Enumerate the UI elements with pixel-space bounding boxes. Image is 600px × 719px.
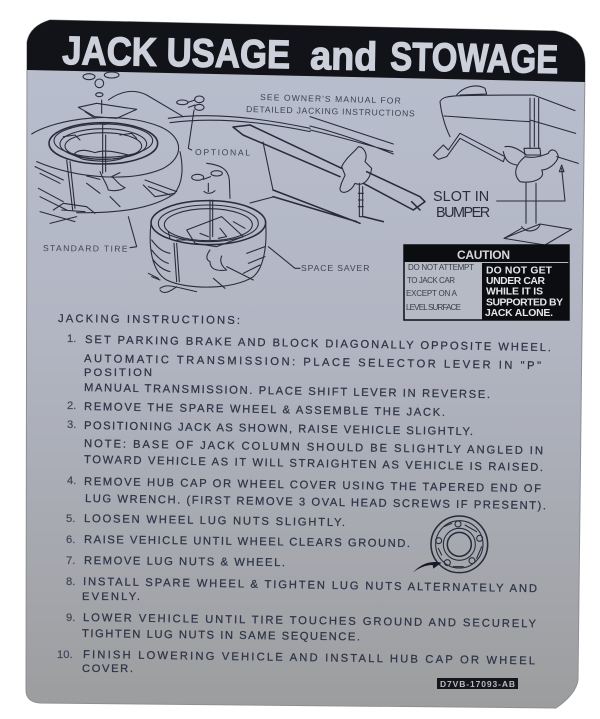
step 3 (67, 419, 543, 474)
caution warning block (482, 263, 569, 320)
caution panel: JACK ALONE. (485, 308, 553, 319)
step 4: LUG WRENCH. (FIRST REMOVE 3 OVAL HEAD SCREWS IF PRESENT). (85, 493, 546, 512)
callout: standard tire: STANDARD TIRE (43, 243, 129, 254)
manual note (246, 92, 416, 118)
step 3: POSITIONING JACK AS SHOWN, RAISE VEHICLE SLIGHTLY. (84, 420, 473, 438)
caution surface note: TO JACK CAR (407, 276, 455, 285)
caution panel: CAUTION (457, 248, 510, 262)
callout: optional: OPTIONAL (195, 147, 252, 158)
step 1: AUTOMATIC TRANSMISSION: PLACE SELECTOR LEVER IN "P" (84, 353, 541, 372)
title text: JACK USAGE (62, 29, 291, 77)
manual note: DETAILED JACKING INSTRUCTIONS (246, 104, 416, 118)
caution panel: SUPPORTED BY (486, 298, 563, 308)
caution panel: WHILE IT IS (486, 286, 543, 298)
step 5: LOOSEN WHEEL LUG NUTS SLIGHTLY. (84, 513, 345, 529)
title text: and (310, 34, 378, 79)
callout: slot in bumper: SLOT IN (433, 189, 490, 205)
step 9 (66, 612, 537, 643)
caution surface note: LEVEL SURFACE (406, 303, 461, 312)
caution surface note: DO NOT ATTEMPT (408, 263, 474, 272)
instructions heading: JACKING INSTRUCTIONS: (58, 313, 240, 327)
title text (62, 29, 559, 82)
part number tag: D7VB-17093-AB (440, 679, 515, 689)
illustration: space saver tire (148, 163, 266, 292)
step 8: EVENLY. (82, 591, 140, 603)
manual note: SEE OWNER'S MANUAL FOR (260, 92, 402, 106)
step 10: FINISH LOWERING VEHICLE AND INSTALL HUB CAP OR WHEEL (83, 649, 535, 667)
step 1: POSITION (84, 367, 152, 379)
callout: slot in bumper: BUMPER (436, 205, 491, 221)
step 3: 3. (67, 419, 76, 431)
callout: standard tire (43, 217, 137, 254)
step 8: 8. (66, 576, 75, 588)
step 2: REMOVE THE SPARE WHEEL & ASSEMBLE THE JACK. (84, 401, 445, 419)
step 10: COVER. (82, 663, 133, 675)
caution panel (404, 245, 569, 320)
step 10: 10. (57, 649, 73, 661)
caution panel: DO NOT GET (486, 266, 553, 276)
step 9: LOWER VEHICLE UNTIL TIRE TOUCHES GROUND AND SECURELY (83, 612, 537, 630)
step 9: 9. (66, 612, 75, 624)
step 1 (67, 333, 551, 401)
step 1: MANUAL TRANSMISSION. PLACE SHIFT LEVER IN REVERSE. (84, 382, 490, 401)
step 6: RAISE VEHICLE UNTIL WHEEL CLEARS GROUND. (84, 534, 410, 550)
step 8 (66, 576, 537, 603)
step 1: SET PARKING BRAKE AND BLOCK DIAGONALLY OPPOSITE WHEEL. (85, 334, 551, 354)
step 5: 5. (66, 513, 75, 525)
step 10 (57, 649, 535, 675)
step 7: REMOVE LUG NUTS & WHEEL. (84, 555, 285, 569)
caution surface note: EXCEPT ON A (406, 289, 458, 298)
illustration: optional wing nut and bracket (168, 96, 310, 150)
step 3: NOTE: BASE OF JACK COLUMN SHOULD BE SLIGHTLY ANGLED IN (84, 438, 543, 457)
step 4 (67, 475, 546, 512)
callout: space saver: SPACE SAVER (301, 263, 371, 273)
illustration: jack lever on body rail (233, 117, 425, 223)
caution surface note (406, 263, 474, 312)
title banner (27, 20, 585, 82)
step 8: INSTALL SPARE WHEEL & TIGHTEN LUG NUTS ALTERNATELY AND (83, 576, 537, 595)
caution panel: UNDER CAR (486, 276, 545, 287)
step 4: 4. (67, 475, 76, 487)
step 1: 1. (67, 333, 76, 345)
step 9: TIGHTEN LUG NUTS IN SAME SEQUENCE. (82, 628, 360, 643)
callout: space saver (268, 247, 371, 273)
icon: lug nut wheel diagram (413, 516, 488, 573)
illustration: jack in bumper slot (433, 86, 578, 245)
step 4: REMOVE HUB CAP OR WHEEL COVER USING THE TAPERED END OF (84, 476, 541, 495)
title text: STOWAGE (390, 35, 559, 82)
illustration: standard tire with jack stowed (32, 72, 183, 223)
step 3: TOWARD VEHICLE AS IT WILL STRAIGHTEN AS VEHICLE IS RAISED. (84, 454, 543, 474)
step 2: 2. (67, 400, 76, 412)
callout: slot in bumper (433, 189, 491, 221)
step 6: 6. (66, 534, 75, 546)
step 7: 7. (66, 555, 75, 567)
caution header (404, 245, 569, 262)
